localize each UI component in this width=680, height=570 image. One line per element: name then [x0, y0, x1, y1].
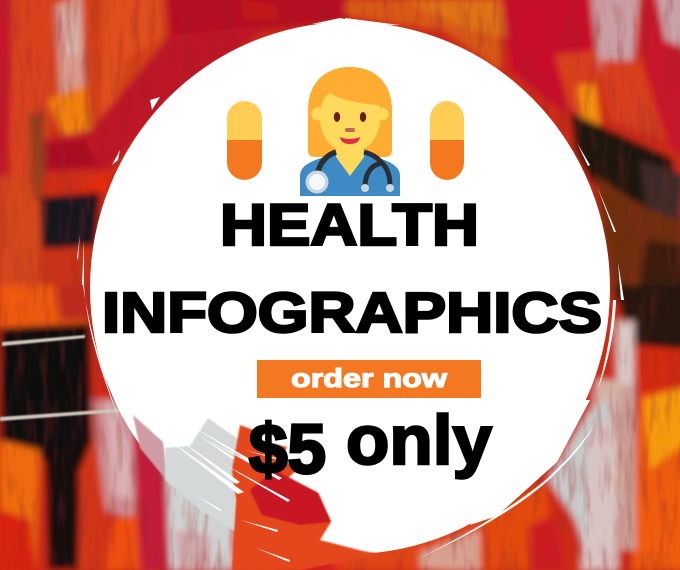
order now button: order now [291, 363, 448, 393]
brush stroke highlights [77, 18, 624, 567]
icon: right pill [430, 101, 464, 180]
icon: female doctor with stethoscope [300, 67, 400, 196]
pale paint streaks [0, 335, 132, 421]
order now button [257, 360, 481, 398]
title: INFOGRAPHICS: INFOGRAPHICS [102, 281, 602, 345]
price: only: only [346, 401, 492, 479]
icon: left pill [227, 101, 262, 180]
title: HEALTH: HEALTH [220, 193, 479, 258]
white brush circle [90, 22, 610, 554]
paint overlapping the circle, lower left [133, 415, 382, 570]
price: $5: $5 [249, 410, 326, 488]
